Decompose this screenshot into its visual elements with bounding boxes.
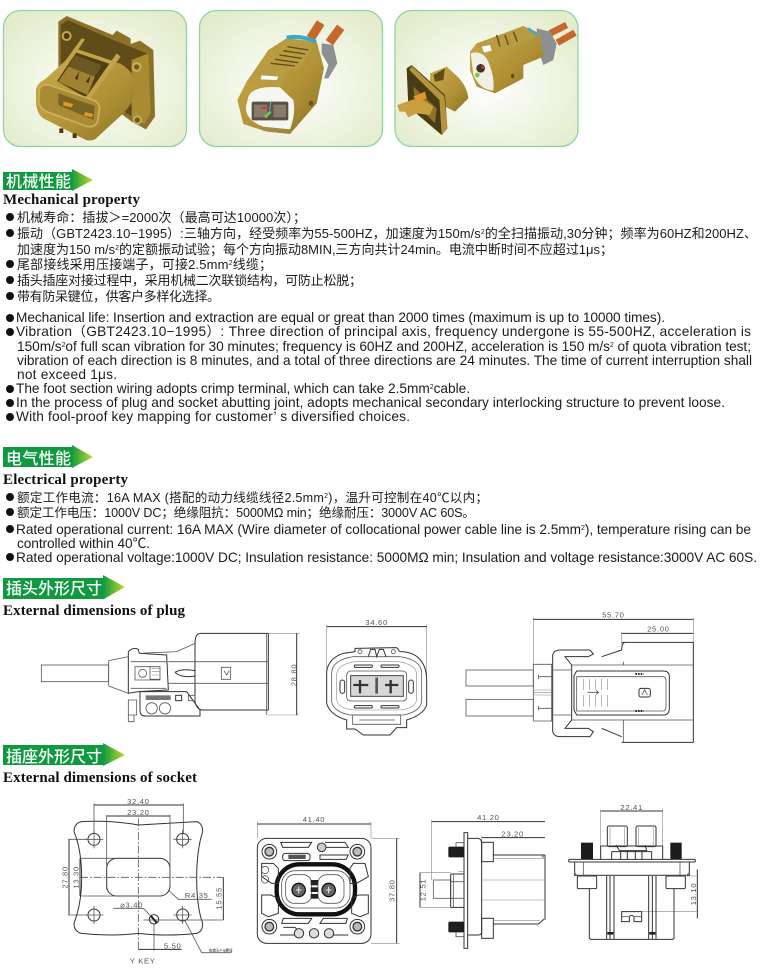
chart: socket panel cutout drawing: 27.80 (61, 866, 70, 889)
chart: socket front view drawing: 37.80 (387, 879, 396, 902)
text block: electrical property: 2 (581, 525, 585, 532)
chart: socket rear view drawing: 22.41 (620, 803, 643, 812)
text block: mechanical property English: of quota vibration test; (614, 339, 751, 354)
text block: mechanical property English: 2 (62, 342, 66, 349)
text block: electrical property: Rated operational voltage:1000V DC; Insulation resistance: 5000MΩ min; Insulation and voltage resistance:3000V AC 60S. (16, 550, 757, 565)
text block: electrical property: 2 (324, 493, 328, 500)
chart: plug top view drawing (466, 611, 693, 742)
panel: socket photo (4, 10, 186, 146)
heading banner: electrical: 电气性能 (6, 450, 71, 468)
text block: mechanical property Chinese: 加速度为150 m/s (17, 242, 115, 257)
chart: socket panel cutout drawing: 32.40 (127, 797, 150, 806)
text block: mechanical property English (6, 310, 752, 424)
chart: socket panel cutout drawing: 15.55 (215, 887, 224, 910)
chart: plug top view drawing: 25.00 (647, 625, 670, 634)
text block: mechanical property English: With fool-proof key mapping for customer’ s diversified choices. (16, 409, 410, 424)
chart: socket panel cutout drawing: 23.20 (127, 808, 150, 817)
chart: plug side view drawing (41, 633, 299, 722)
icon: plug connector render (237, 23, 341, 134)
text block: mechanical property Chinese: 机械寿命：插拔＞=2000次（最高可达10000次）； (17, 210, 306, 226)
text block: mechanical property Chinese: 的定额振动试验；每个方向振动8MIN,三方向共计24min。电流中断时间不应超过1μs； (119, 242, 613, 258)
chart: socket panel cutout drawing: 13.30 (72, 866, 81, 889)
text block: mechanical property Chinese: 线缆； (233, 257, 272, 273)
text block: electrical property: controlled within 40℃. (17, 536, 150, 551)
chart: socket panel cutout drawing: Y KEY (130, 956, 156, 965)
text block: mechanical property Chinese: 的全扫描振动,30分钟；频率为60HZ和200HZ、 (485, 226, 757, 242)
chart: socket side view drawing: 12.51 (418, 879, 427, 901)
chart: socket panel cutout drawing: R4.35 (185, 891, 209, 900)
text block: electrical property (6, 490, 757, 565)
text block: mechanical property Chinese: 尾部接线采用压接端子，可接2.5mm (17, 257, 228, 272)
heading: External dimensions of plug: External dimensions of plug (3, 603, 186, 619)
text block: mechanical property English: 2 (610, 342, 614, 349)
heading banner: plug dimensions: 插头外形尺寸 (6, 580, 102, 598)
text block: electrical property: 额定工作电压：1000V DC；绝缘阻抗：5000MΩ min；绝缘耐压：3000V AC 60S。 (17, 505, 475, 521)
text block: electrical property: 额定工作电流：16A MAX (搭配的动力线缆线径2.5mm (17, 491, 324, 505)
text block: mechanical property English: cable. (434, 381, 470, 396)
text block: mechanical property English: of full scan vibration for 30 minutes; frequency is 60HZ and 200HZ, acceleration is 150 m/s (65, 339, 610, 354)
heading: Mechanical property: Mechanical property (3, 192, 140, 208)
icon: socket connector render (36, 16, 155, 140)
chart: socket panel cutout drawing: 5.50 (164, 942, 181, 951)
text block: mechanical property Chinese: 带有防呆键位，供客户多样化选择。 (17, 289, 220, 304)
heading banner: socket dimensions (3, 743, 125, 766)
panel: mated pair photo (395, 10, 578, 146)
chart: socket panel cutout drawing (61, 797, 233, 965)
text block: mechanical property Chinese: 2 (115, 245, 119, 252)
chart: socket side view drawing: 23.20 (501, 830, 524, 839)
heading banner: plug dimensions (3, 575, 125, 600)
chart: socket front view drawing: 41.40 (303, 815, 325, 824)
heading: External dimensions of socket: External dimensions of socket (3, 770, 197, 786)
heading: Electrical property: Electrical property (3, 472, 128, 488)
text block: mechanical property Chinese (6, 210, 757, 304)
text block: mechanical property English: In the process of plug and socket abutting joint, adopts mechanical secondary interlocking structure to prevent loose. (16, 395, 725, 410)
text block: mechanical property English: The foot section wiring adopts crimp terminal, which can take 2.5mm (16, 381, 430, 396)
heading banner: electrical (3, 445, 93, 468)
chart: socket rear view drawing (569, 803, 698, 939)
chart: socket side view drawing: 41.20 (477, 813, 500, 822)
text block: mechanical property English: Mechanical life: Insertion and extraction are equal or great than 2000 times (maximum is up to 10000 times). (16, 310, 665, 325)
heading banner: socket dimensions: 插座外形尺寸 (6, 748, 102, 766)
text block: mechanical property Chinese: 2 (229, 260, 233, 267)
chart: plug top view drawing: 55.70 (602, 611, 625, 620)
text block: mechanical property Chinese: 插头插座对接过程中，采用机械二次联锁结构，可防止松脱； (17, 273, 362, 289)
text block: mechanical property English: 2 (430, 384, 434, 391)
chart: socket front view drawing (257, 815, 399, 943)
panel: plug photo (200, 10, 382, 146)
text block: electrical property: ), temperature rising can be (585, 522, 751, 537)
text block: mechanical property English: 150m/s (17, 339, 62, 354)
heading banner: mechanical: 机械性能 (6, 173, 71, 191)
chart: socket panel cutout drawing: 安装孔4-φ螺母 (209, 947, 233, 952)
chart: plug side view drawing: 28.80 (289, 664, 298, 686)
chart: socket side view drawing (418, 813, 545, 948)
heading banner: mechanical (3, 169, 93, 191)
chart: socket panel cutout drawing: ⌀3.40 (120, 900, 143, 909)
text block: electrical property: )，温升可控制在40℃以内； (328, 491, 488, 506)
text block: mechanical property English: Vibration（GBT2423.10−1995）: Three direction of principal axis, frequency undergone is 55-500HZ, acceleration is (16, 324, 751, 339)
chart: plug front view drawing (327, 618, 427, 735)
text block: mechanical property Chinese: 振动（GBT2423.10−1995）:三轴方向，经受频率为55-500HZ，加速度为150m/s (17, 226, 481, 241)
chart: plug front view drawing: 34.60 (365, 618, 388, 627)
text block: mechanical property English: vibration of each direction is 8 minutes, and a total of three directions are 24 minutes. The time of current interruption shall (17, 353, 752, 368)
text block: mechanical property Chinese: 2 (481, 229, 485, 236)
text block: mechanical property English: not exceed 1μs. (17, 367, 117, 382)
text block: electrical property: Rated operational current: 16A MAX (Wire diameter of collocational power cable line is 2.5mm (16, 522, 581, 537)
icon: exploded connector render (397, 25, 575, 135)
chart: socket rear view drawing: 13.10 (689, 883, 698, 905)
